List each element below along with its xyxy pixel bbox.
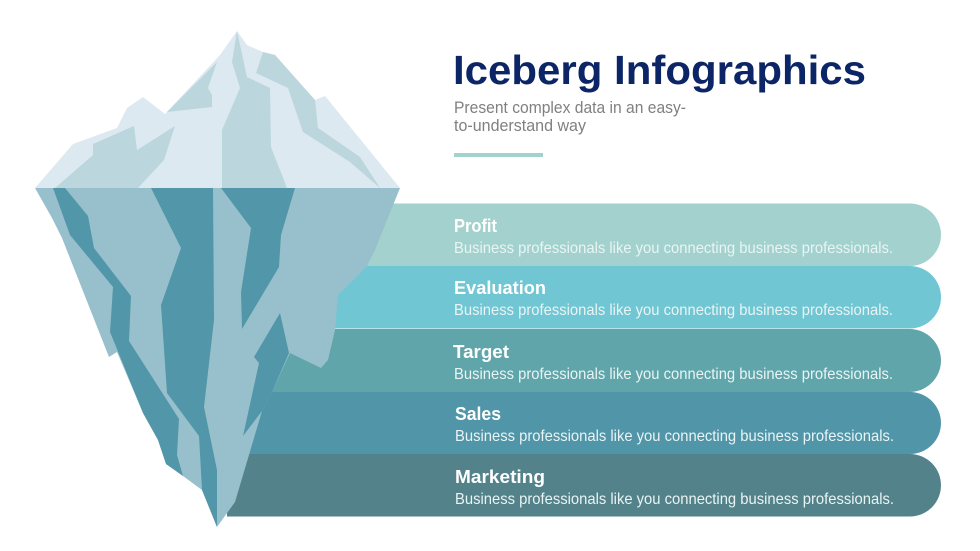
bar: sales	[240, 392, 941, 454]
bar: marketing: Business professionals like you connecting business professionals.	[455, 491, 894, 508]
subtitle	[454, 98, 686, 135]
bar: target: Business professionals like you connecting business professionals.	[454, 366, 893, 383]
bar: profit: Business professionals like you connecting business professionals.	[454, 240, 893, 257]
bar: target	[260, 329, 941, 392]
subtitle: Present complex data in an easy-	[454, 98, 686, 117]
bar: sales: Sales	[455, 404, 501, 424]
iceberg: underwater section	[35, 188, 400, 527]
subtitle: to-understand way	[454, 116, 586, 135]
bar: marketing	[227, 454, 941, 516]
title accent line	[454, 153, 543, 157]
title: Iceberg Infographics	[453, 47, 866, 93]
bar: evaluation: Business professionals like you connecting business professionals.	[454, 302, 893, 319]
layered bars	[227, 204, 941, 516]
bar: target: Target	[453, 342, 509, 362]
bar: profit	[340, 204, 941, 266]
bar: evaluation	[320, 266, 941, 328]
iceberg illustration	[35, 31, 400, 527]
bar: evaluation: Evaluation	[454, 278, 546, 298]
bar: marketing: Marketing	[455, 467, 545, 487]
bar: profit: Profit	[454, 216, 497, 236]
bar: sales: Business professionals like you connecting business professionals.	[455, 428, 894, 445]
iceberg: tip above water	[35, 31, 400, 188]
